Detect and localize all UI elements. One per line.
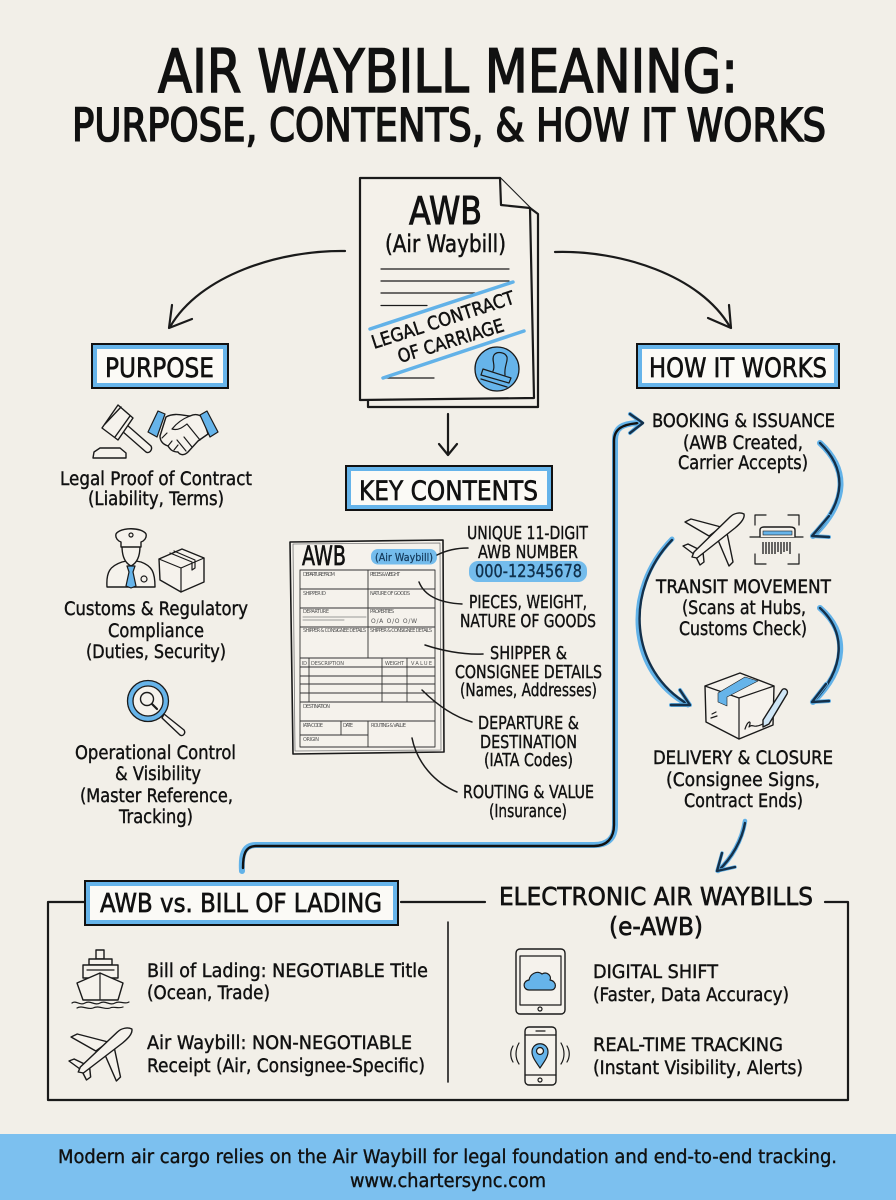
form sheet: ID bbox=[302, 661, 307, 667]
form sheet: SHIPPER & CONSIGNEE DETAILS bbox=[370, 628, 432, 634]
title: AIR WAYBILL MEANING: bbox=[158, 37, 738, 107]
form sheet: NATURE OF GOODS bbox=[370, 591, 410, 597]
heading: electronic air waybills: ELECTRONIC AIR WAYBILLS bbox=[499, 882, 813, 911]
text: operational control and visibility bbox=[75, 743, 236, 828]
text: real-time tracking: REAL-TIME TRACKING bbox=[593, 1035, 783, 1056]
arrow: transit to delivery left bbox=[638, 539, 690, 705]
icon: handshake bbox=[148, 411, 218, 455]
icon: airplane bbox=[69, 1028, 132, 1081]
text: real-time tracking: (Instant Visibility, Alerts) bbox=[593, 1058, 803, 1079]
title bbox=[72, 37, 826, 152]
icon: ship bbox=[72, 950, 129, 1008]
label: shipper and consignee: (Names, Addresses) bbox=[460, 681, 597, 701]
icon: cardboard box bbox=[159, 549, 204, 592]
arrow: bill of lading to booking connector bbox=[242, 414, 643, 871]
text: operational control and visibility: Tracking) bbox=[118, 807, 193, 828]
form sheet: PROPERTIES bbox=[370, 609, 394, 615]
text: bill of lading: Bill of Lading: NEGOTIABLE Title bbox=[147, 961, 428, 982]
text: real-time tracking bbox=[593, 1035, 803, 1079]
label: pieces and weight: NATURE OF GOODS bbox=[460, 612, 596, 632]
text: operational control and visibility: Operational Control bbox=[75, 743, 236, 764]
footer band: Modern air cargo relies on the Air Waybill for legal foundation and end-to-end tracking. bbox=[58, 1147, 837, 1168]
label: shipper and consignee: CONSIGNEE DETAILS bbox=[455, 663, 602, 683]
text: customs and regulatory compliance: Compliance bbox=[108, 621, 204, 642]
form sheet: SHIPPER ID bbox=[303, 591, 326, 597]
central document: AWB legal contract: (Air Waybill) bbox=[385, 230, 506, 258]
heading: electronic air waybills: (e-AWB) bbox=[609, 912, 703, 941]
icon: tablet with cloud bbox=[516, 949, 565, 1014]
text: customs and regulatory compliance: Customs & Regulatory bbox=[64, 599, 248, 620]
form sheet: PIECES & WEIGHT bbox=[370, 572, 401, 578]
icon: airplane bbox=[683, 513, 744, 566]
text: air waybill: Receipt (Air, Consignee-Specific) bbox=[147, 1056, 425, 1077]
text: customs and regulatory compliance bbox=[64, 599, 248, 663]
text: booking and issuance: BOOKING & ISSUANCE bbox=[652, 411, 835, 432]
form sheet: IATA CODE bbox=[303, 723, 323, 729]
text: booking and issuance bbox=[652, 411, 835, 474]
icon: customs officer bbox=[107, 529, 155, 588]
arrow: transit to delivery right bbox=[812, 608, 840, 702]
icon: box with pen bbox=[705, 673, 787, 739]
heading: key contents: KEY CONTENTS bbox=[359, 476, 538, 507]
heading: key contents bbox=[346, 466, 552, 510]
heading: how it works: HOW IT WORKS bbox=[649, 353, 827, 384]
label: pieces and weight bbox=[460, 593, 596, 632]
form sheet: DEPARTURE bbox=[303, 609, 329, 615]
label: routing and value bbox=[463, 783, 594, 822]
footer band bbox=[0, 1134, 896, 1200]
text: air waybill: Air Waybill: NON-NEGOTIABLE bbox=[147, 1033, 412, 1054]
label: shipper and consignee bbox=[455, 644, 602, 701]
icon: rubber stamp bbox=[475, 347, 519, 391]
label: AWB number: UNIQUE 11-DIGIT bbox=[467, 524, 588, 544]
text: air waybill bbox=[147, 1033, 425, 1077]
icon: magnifying glass bbox=[128, 680, 185, 736]
leader lines bbox=[412, 548, 483, 792]
arrow: document to how it works bbox=[555, 252, 731, 328]
central document: AWB legal contract: AWB bbox=[409, 189, 482, 233]
panel: purpose items bbox=[60, 405, 252, 828]
form sheet: VALUE bbox=[411, 661, 432, 667]
arrow: document to key contents bbox=[439, 414, 457, 455]
text: bill of lading: (Ocean, Trade) bbox=[147, 983, 270, 1004]
central document: AWB legal contract bbox=[360, 178, 538, 407]
label: routing and value: (Insurance) bbox=[489, 802, 567, 822]
text: booking and issuance: Carrier Accepts) bbox=[678, 453, 808, 474]
form sheet: DESTINATION bbox=[303, 704, 330, 710]
text: transit movement bbox=[655, 577, 832, 640]
form sheet bbox=[290, 540, 444, 754]
text: bill of lading bbox=[147, 961, 428, 1004]
text: delivery and closure: Contract Ends) bbox=[684, 791, 803, 812]
heading: purpose: PURPOSE bbox=[105, 353, 214, 384]
form sheet: O/A O/O O/W bbox=[371, 618, 417, 625]
panel: bottom comparison frame bbox=[48, 902, 848, 1100]
heading: electronic air waybills bbox=[499, 882, 813, 941]
text: transit movement: (Scans at Hubs, bbox=[682, 598, 806, 619]
text: transit movement: TRANSIT MOVEMENT bbox=[655, 577, 832, 598]
arrow: booking to transit bbox=[812, 443, 841, 537]
form sheet: (Air Waybill) bbox=[375, 551, 433, 564]
heading: purpose bbox=[92, 344, 228, 388]
label: routing and value: ROUTING & VALUE bbox=[463, 783, 594, 803]
heading: how it works bbox=[637, 344, 839, 388]
text: operational control and visibility: (Master Reference, bbox=[80, 786, 233, 807]
text: digital shift bbox=[593, 962, 789, 1006]
icon: gavel bbox=[93, 405, 152, 458]
label: departure and destination: DESTINATION bbox=[480, 733, 577, 753]
form sheet: DATE bbox=[343, 723, 353, 729]
label: departure and destination: (IATA Codes) bbox=[484, 751, 573, 771]
text: operational control and visibility: & Visibility bbox=[115, 764, 201, 785]
text: digital shift: (Faster, Data Accuracy) bbox=[593, 985, 789, 1006]
panel: key contents form bbox=[290, 524, 602, 822]
arrow: delivery to e-AWB bbox=[717, 821, 745, 871]
text: delivery and closure bbox=[653, 748, 833, 812]
text: digital shift: DIGITAL SHIFT bbox=[593, 962, 719, 983]
text: legal proof of contract: Legal Proof of Contract bbox=[60, 469, 252, 490]
text: legal proof of contract: (Liability, Terms) bbox=[88, 489, 224, 510]
form sheet: DEPARTURE FROM bbox=[303, 572, 335, 578]
footer band: www.chartersync.com bbox=[350, 1171, 546, 1192]
heading: AWB vs bill of lading bbox=[85, 881, 398, 925]
icon: barcode scanner bbox=[750, 515, 803, 564]
panel: e-AWB items bbox=[511, 949, 803, 1085]
text: customs and regulatory compliance: (Duties, Security) bbox=[86, 642, 226, 663]
label: departure and destination: DEPARTURE & bbox=[478, 714, 579, 734]
label: shipper and consignee: SHIPPER & bbox=[490, 644, 567, 664]
label: AWB number: AWB NUMBER bbox=[478, 543, 578, 563]
form sheet: SHIPPER & CONSIGNEE DETAILS bbox=[303, 628, 366, 634]
form sheet: DESCRIPTION bbox=[311, 661, 344, 667]
text: transit movement: Customs Check) bbox=[679, 619, 807, 640]
panel: AWB vs bill of lading items bbox=[69, 950, 428, 1081]
panel: how it works steps bbox=[638, 411, 841, 871]
text: delivery and closure: (Consignee Signs, bbox=[666, 770, 820, 791]
label: AWB number bbox=[467, 524, 588, 582]
central document: AWB legal contract: LEGAL CONTRACT bbox=[369, 288, 518, 354]
form sheet: ORIGIN bbox=[303, 737, 319, 743]
form sheet: ROUTING & VALUE bbox=[371, 723, 406, 729]
form sheet: AWB bbox=[302, 541, 346, 572]
icon: phone with location pin bbox=[511, 1027, 569, 1085]
text: legal proof of contract bbox=[60, 469, 252, 510]
text: booking and issuance: (AWB Created, bbox=[683, 433, 803, 454]
arrow: document to purpose bbox=[169, 251, 345, 328]
label: pieces and weight: PIECES, WEIGHT, bbox=[469, 593, 587, 613]
label: departure and destination bbox=[478, 714, 579, 771]
text: delivery and closure: DELIVERY & CLOSURE bbox=[653, 748, 833, 769]
central document: AWB legal contract: OF CARRIAGE bbox=[395, 316, 507, 368]
label: AWB number: 000-12345678 bbox=[475, 562, 582, 582]
heading: AWB vs bill of lading: AWB vs. BILL OF LADING bbox=[100, 889, 382, 919]
form sheet: WEIGHT bbox=[385, 661, 405, 667]
